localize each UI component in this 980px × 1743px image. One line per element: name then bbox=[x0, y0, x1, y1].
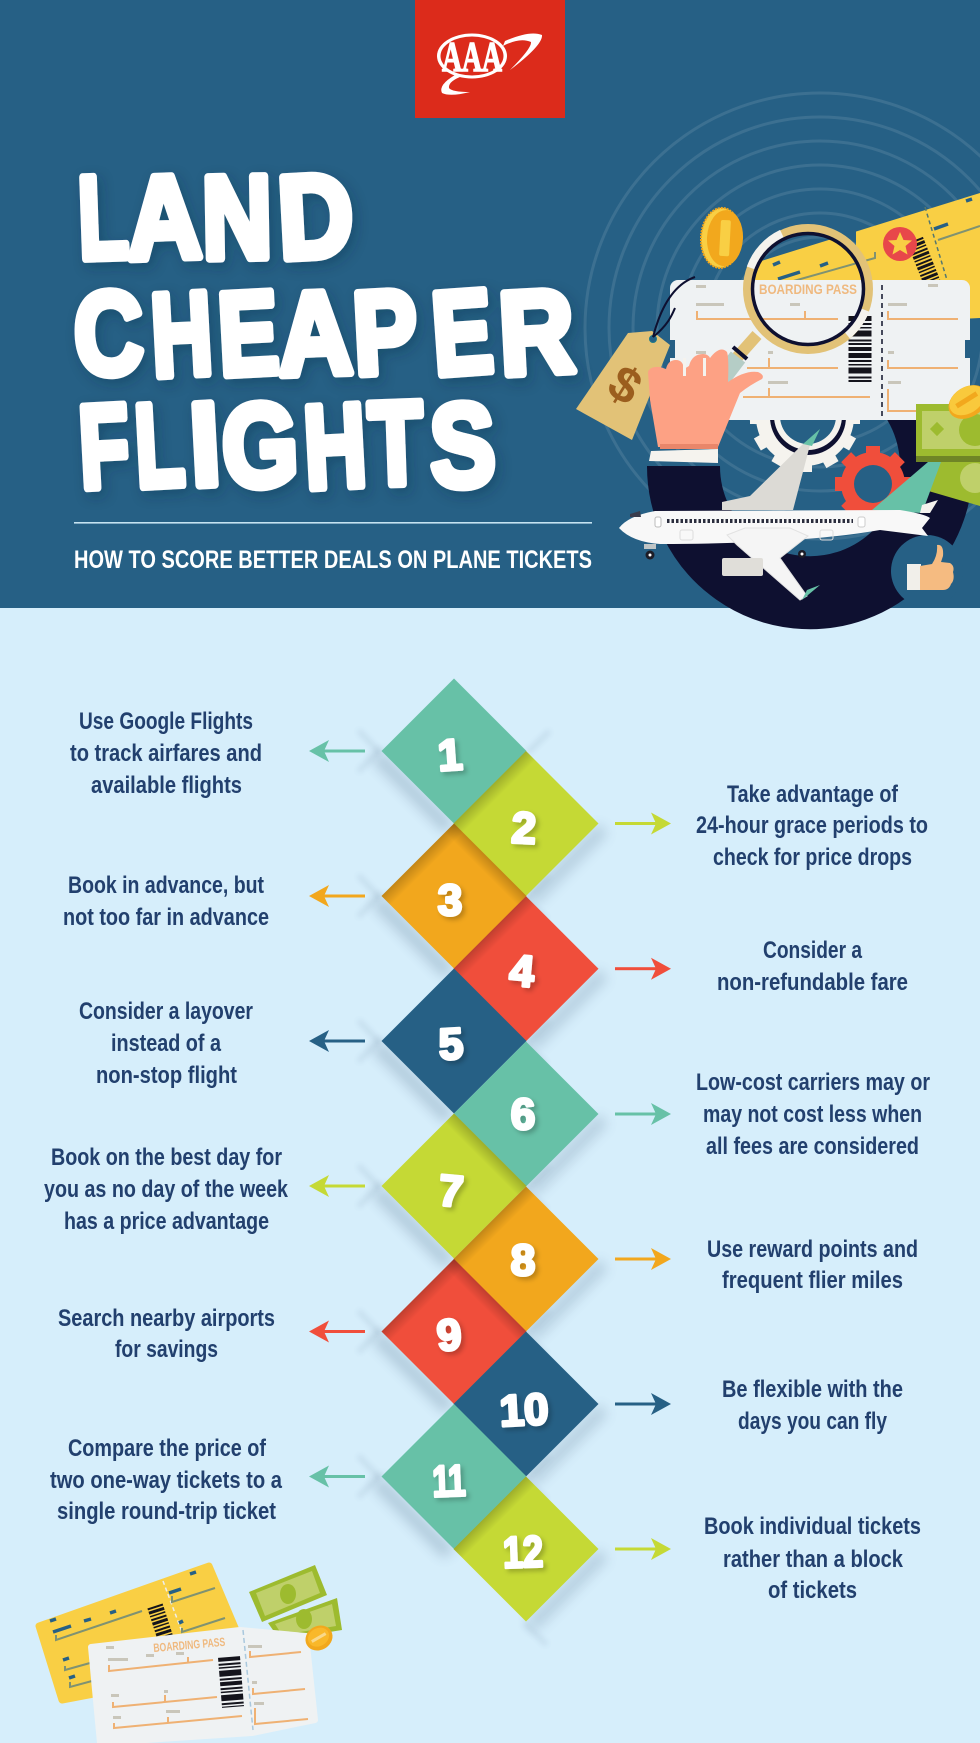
step 3 diamond bbox=[382, 824, 526, 968]
step numbers: 8 bbox=[511, 1236, 535, 1285]
step numbers: 5 bbox=[438, 1019, 465, 1070]
bottom tickets illustration bbox=[39, 1565, 342, 1743]
price tag bbox=[576, 277, 695, 440]
concentric rings bbox=[585, 93, 980, 563]
step 11 diamond bbox=[382, 1404, 526, 1549]
arrow 12 bbox=[615, 1538, 671, 1560]
text step 12 bbox=[704, 1513, 921, 1604]
text step 9: for savings bbox=[115, 1336, 218, 1363]
title: C bbox=[72, 267, 145, 401]
step 6 diamond bbox=[454, 1042, 598, 1186]
step 2 diamond bbox=[454, 751, 598, 896]
text step 8: frequent flier miles bbox=[722, 1267, 903, 1294]
arrow 11 bbox=[309, 1466, 365, 1488]
title: I bbox=[187, 378, 223, 512]
airplane bbox=[619, 429, 941, 600]
text step 3: Book in advance, but bbox=[68, 872, 264, 899]
text step 6: all fees are considered bbox=[706, 1133, 919, 1160]
title: H bbox=[148, 267, 216, 402]
step numbers: 10 bbox=[498, 1385, 550, 1436]
text step 4: non-refundable fare bbox=[717, 969, 908, 996]
text step 1: available flights bbox=[91, 772, 242, 799]
text step 1: Use Google Flights bbox=[79, 708, 253, 735]
AAA logo bbox=[415, 0, 565, 118]
title: L bbox=[132, 379, 187, 513]
step numbers: 3 bbox=[438, 876, 462, 925]
header panel bbox=[0, 0, 980, 608]
text step 2: Take advantage of bbox=[727, 781, 899, 808]
barcode bbox=[229, 1657, 233, 1707]
step 5 diamond bbox=[382, 968, 526, 1114]
text step 6: Low-cost carriers may or bbox=[696, 1069, 930, 1096]
title rule bbox=[74, 522, 592, 524]
text step 5: non-stop flight bbox=[96, 1062, 237, 1089]
step 10 diamond bbox=[454, 1332, 598, 1476]
arrow 9 bbox=[309, 1320, 365, 1342]
text step 5: Consider a layover bbox=[79, 998, 253, 1025]
boarding pass: BOARDING PASS bbox=[759, 281, 857, 297]
magnifying glass bbox=[722, 228, 868, 378]
title bbox=[72, 149, 578, 514]
step numbers: 2 bbox=[510, 803, 537, 854]
banknotes bbox=[249, 1565, 342, 1640]
step 7 diamond bbox=[382, 1114, 526, 1258]
shirt cuff bbox=[649, 449, 718, 463]
barcode bbox=[848, 316, 872, 384]
arrow 3 bbox=[309, 885, 365, 907]
arrow 7 bbox=[309, 1175, 365, 1197]
subtitle: HOW TO SCORE BETTER DEALS ON PLANE TICKETS bbox=[74, 546, 592, 574]
text step 2: 24-hour grace periods to bbox=[696, 812, 928, 839]
white gear bbox=[750, 362, 860, 472]
text step 7 bbox=[44, 1144, 288, 1235]
text step 6 bbox=[696, 1069, 930, 1160]
arrow 1 bbox=[309, 740, 365, 762]
text step 5: instead of a bbox=[111, 1030, 221, 1057]
hero illustration bbox=[576, 193, 980, 607]
red gear bbox=[835, 446, 911, 522]
step 12 diamond bbox=[454, 1476, 598, 1622]
boarding pass bbox=[670, 280, 971, 420]
text step 9: Search nearby airports bbox=[58, 1305, 275, 1332]
thumbs up badge bbox=[891, 535, 963, 607]
step numbers: 7 bbox=[437, 1166, 465, 1217]
step 1 diamond bbox=[382, 678, 526, 824]
step numbers: 6 bbox=[511, 1090, 535, 1139]
title: T bbox=[367, 377, 425, 511]
text step 7: has a price advantage bbox=[64, 1208, 269, 1235]
text step 11: Compare the price of bbox=[68, 1435, 267, 1462]
step numbers: 12 bbox=[502, 1527, 544, 1578]
text step 11: single round-trip ticket bbox=[57, 1498, 276, 1525]
gold coin bbox=[699, 207, 745, 269]
text step 11: two one-way tickets to a bbox=[50, 1467, 282, 1494]
title: N bbox=[201, 151, 273, 285]
yellow ticket bbox=[39, 1566, 239, 1700]
text step 12: of tickets bbox=[768, 1577, 857, 1604]
AAA logo: AAA bbox=[442, 35, 502, 81]
text step 1: to track airfares and bbox=[70, 740, 262, 767]
text step 8: Use reward points and bbox=[707, 1236, 918, 1263]
title: F bbox=[76, 380, 133, 514]
text step 7: Book on the best day for bbox=[51, 1144, 282, 1171]
title: E bbox=[215, 266, 282, 401]
title: A bbox=[125, 151, 203, 285]
title: A bbox=[276, 267, 354, 401]
text step 4 bbox=[717, 937, 908, 996]
title: R bbox=[496, 265, 578, 401]
text step 12: Book individual tickets bbox=[704, 1513, 921, 1540]
arrow 4 bbox=[615, 958, 671, 980]
text step 12: rather than a block bbox=[723, 1546, 903, 1573]
text step 10: days you can fly bbox=[738, 1408, 887, 1435]
text step 3 bbox=[63, 872, 269, 931]
step numbers: 9 bbox=[435, 1310, 463, 1361]
banknotes bbox=[916, 378, 980, 506]
arrow 2 bbox=[615, 812, 671, 834]
step numbers: 11 bbox=[432, 1456, 466, 1507]
step 4 diamond bbox=[454, 896, 598, 1041]
arrow 6 bbox=[615, 1103, 671, 1125]
white boarding pass: BOARDING PASS bbox=[153, 1635, 226, 1655]
text step 1 bbox=[70, 708, 262, 799]
text step 5 bbox=[79, 998, 253, 1089]
step numbers: 4 bbox=[508, 946, 537, 997]
text step 6: may not cost less when bbox=[703, 1101, 922, 1128]
arrow 8 bbox=[615, 1248, 671, 1270]
text step 10 bbox=[722, 1376, 903, 1435]
text step 4: Consider a bbox=[763, 937, 862, 964]
text step 2 bbox=[696, 781, 928, 871]
step numbers bbox=[432, 730, 550, 1578]
text step 7: you as no day of the week bbox=[44, 1176, 288, 1203]
diamond shadows bbox=[357, 729, 608, 1646]
title: H bbox=[301, 379, 370, 514]
text step 8 bbox=[707, 1236, 918, 1294]
coin bbox=[301, 1621, 337, 1655]
text step 2: check for price drops bbox=[713, 844, 912, 871]
yellow ticket bbox=[755, 193, 980, 318]
title: P bbox=[350, 265, 421, 401]
text step 11 bbox=[50, 1435, 282, 1525]
title: E bbox=[428, 265, 497, 401]
hand bbox=[648, 350, 763, 463]
text step 3: not too far in advance bbox=[63, 904, 269, 931]
title: S bbox=[428, 379, 497, 513]
title: G bbox=[220, 379, 300, 513]
price tag: $ bbox=[598, 354, 652, 416]
step numbers: 1 bbox=[436, 730, 464, 781]
arrow 10 bbox=[615, 1393, 671, 1415]
step 9 diamond bbox=[382, 1259, 526, 1404]
white boarding pass bbox=[91, 1630, 315, 1743]
navy arm arc bbox=[683, 385, 936, 593]
text step 9 bbox=[58, 1305, 275, 1363]
text step 10: Be flexible with the bbox=[722, 1376, 903, 1403]
star badge bbox=[883, 227, 917, 261]
barcode bbox=[155, 1606, 166, 1640]
barcode on yellow ticket bbox=[915, 240, 933, 285]
title: D bbox=[275, 149, 356, 285]
title: L bbox=[76, 151, 130, 285]
arrow 5 bbox=[309, 1030, 365, 1052]
step 8 diamond bbox=[454, 1186, 598, 1332]
